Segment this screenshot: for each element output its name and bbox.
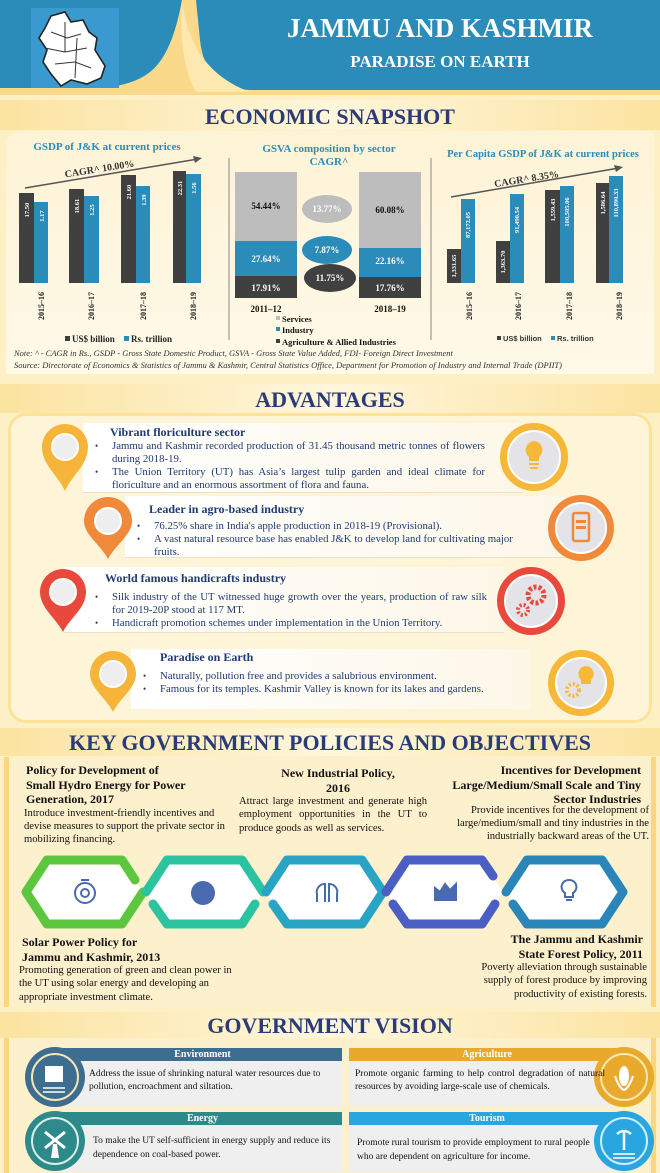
notes and source: Note: ^ - CAGR in Rs., GSDP - Gross State Domestic Product, GSVA - Gross State Value Added, FDI- Foreign Direct Investment — [14, 348, 453, 358]
subtitle: PARADISE ON EARTH — [350, 52, 530, 71]
chart: GSDP bars: Rs. trillion — [131, 334, 172, 344]
chart: GSDP bars: 17.50 — [24, 203, 31, 217]
notes and source — [14, 348, 562, 370]
policy: new industrial: Attract large investment and generate high employment opportunities in the UT to produce goods as well as services. — [239, 796, 427, 834]
card: tourism — [349, 1111, 654, 1172]
title: JAMMU AND KASHMIR — [287, 13, 593, 43]
chart: GSDP bars: 1.25 — [89, 204, 96, 216]
chart: GSVA composition: 54.44% — [251, 201, 281, 211]
policy: forest: State Forest Policy, 2011 — [519, 947, 643, 961]
chart: GSVA composition: GSVA composition by sector — [262, 143, 396, 155]
header banner — [0, 0, 660, 95]
advantage row 2: agro-based: A vast natural resource base has enabled J&K to develop land for cultivating major fruits. — [154, 533, 513, 558]
policy: incentives — [452, 763, 650, 842]
card: tourism: Tourism — [469, 1113, 505, 1124]
policy: incentives: Sector Industries — [554, 792, 641, 806]
policy: incentives: Large/Medium/Small Scale and Tiny — [452, 778, 641, 792]
icon: J&K map — [31, 8, 119, 88]
advantage row 2: agro-based: Leader in agro-based industry — [149, 502, 304, 516]
card: agriculture — [349, 1047, 654, 1107]
policy: incentives: Provide incentives for the development of large/medium/small and tiny industries in the industrially backward areas of the UT. — [457, 805, 649, 842]
chart: GSDP bars: 2018–19 — [189, 292, 198, 320]
advantage row 3: handicrafts: Handicraft promotion schemes under implementation in the Union Territory. — [112, 617, 442, 629]
panel: government vision — [4, 1038, 656, 1173]
policy: new industrial — [239, 766, 427, 834]
icon: bulb gear circle — [548, 650, 614, 716]
chart: per capita GSDP: 1,363.70 — [500, 251, 507, 273]
chart: GSVA composition: 17.76% — [375, 283, 405, 293]
panel: economic snapshot — [6, 131, 654, 374]
icon: mobile circle — [548, 495, 614, 561]
hexagon chain — [22, 856, 628, 928]
chart: GSVA composition — [228, 143, 432, 347]
advantage row 2: agro-based: 76.25% share in India's apple production in 2018-19 (Provisional). — [154, 520, 442, 532]
card: agriculture: Agriculture — [462, 1049, 512, 1060]
advantage row 3: handicrafts: Silk industry of the UT witnessed huge growth over the years, production of raw silk for 2019-20P stood at 117 MT. — [112, 591, 487, 616]
card: energy — [25, 1111, 342, 1172]
advantage row 1: floriculture: Jammu and Kashmir recorded production of 31.45 thousand metric tonnes of flowers during 2018-19. — [112, 440, 485, 465]
chart: GSVA composition: 17.91% — [251, 283, 281, 293]
icon: pin — [40, 569, 86, 632]
policy: small hydro: Generation, 2017 — [26, 792, 114, 806]
chart: GSDP bars: US$ billion — [72, 334, 115, 344]
chart: per capita GSDP: Per Capita GSDP of J&K at current prices — [447, 149, 639, 160]
chart: per capita GSDP: Rs. trillion — [557, 334, 594, 343]
policy: new industrial: New Industrial Policy, — [281, 766, 395, 780]
chart: GSDP bars: 1.39 — [141, 194, 148, 206]
card: energy: To make the UT self-sufficient in energy supply and reduce its dependence on coal-based power. — [93, 1136, 330, 1160]
advantage row 1: floriculture: Vibrant floriculture sector — [110, 425, 245, 439]
card: energy: Energy — [187, 1113, 218, 1124]
card: agriculture: Promote organic farming to help control degradation of natural resources by avoiding large-scale use of chemicals. — [355, 1069, 605, 1092]
card: environment — [25, 1047, 342, 1107]
policy: new industrial: 2016 — [326, 781, 350, 795]
policy: forest: The Jammu and Kashmir — [511, 932, 643, 946]
policy: small hydro: Policy for Development of — [26, 763, 159, 777]
chart: GSDP bars: 2016–17 — [87, 292, 96, 320]
chart: GSDP bars: 18.61 — [74, 199, 81, 213]
chart: GSDP bars: CAGR^ 10.00% — [64, 159, 135, 180]
chart: GSVA composition: Agriculture & Allied Industries — [282, 337, 397, 347]
heading: government vision: GOVERNMENT VISION — [207, 1013, 453, 1038]
chart: GSDP bars: 1.17 — [39, 210, 46, 222]
policy: incentives: Incentives for Development — [501, 763, 641, 777]
policy: forest — [481, 932, 647, 1000]
chart: per capita GSDP: 1,331.65 — [451, 254, 458, 277]
icon: pin — [90, 651, 136, 712]
chart: GSDP bars — [19, 141, 202, 344]
chart: per capita GSDP — [447, 149, 639, 343]
policy: small hydro — [24, 763, 225, 845]
chart: GSVA composition: 22.16% — [375, 256, 405, 266]
chart: per capita GSDP: 1,559.43 — [550, 198, 557, 221]
heading: key government policies: KEY GOVERNMENT POLICIES AND OBJECTIVES — [69, 730, 591, 755]
heading: advantages: ADVANTAGES — [255, 387, 405, 412]
chart: GSDP bars: GSDP of J&K at current prices — [33, 141, 181, 153]
chart: GSDP bars: 21.60 — [126, 185, 133, 199]
chart: GSVA composition: Industry — [282, 325, 314, 335]
chart: per capita GSDP: 87,172.05 — [465, 211, 472, 238]
advantage row 2: agro-based — [84, 495, 614, 561]
chart: GSVA composition: 2011–12 — [250, 304, 282, 314]
icon: pin — [42, 424, 88, 491]
chart: GSVA composition: 13.77% — [312, 204, 342, 214]
chart: per capita GSDP: 2016–17 — [514, 292, 523, 320]
notes and source: Source: Directorate of Economics & Statistics of Jammu & Kashmir, Central Statistics Office, Department for Promotion of Industry and Internal Trade (DPIIT) — [14, 360, 562, 370]
advantage row 4: paradise on earth: Paradise on Earth — [160, 650, 253, 664]
advantage row 1: floriculture — [42, 423, 568, 493]
chart: GSDP bars: 22.31 — [177, 181, 184, 195]
chart: GSVA composition: 60.08% — [375, 205, 405, 215]
chart: GSVA composition: 11.75% — [316, 273, 344, 283]
chart: per capita GSDP: 91,490.54 — [514, 206, 521, 233]
chart: per capita GSDP: 1,586.64 — [600, 191, 607, 214]
chart: per capita GSDP: 100,505.06 — [564, 197, 571, 227]
chart: GSDP bars: 2017–18 — [139, 292, 148, 320]
chart: per capita GSDP: 2017–18 — [565, 292, 574, 320]
icon: gears circle — [497, 567, 565, 635]
chart: GSVA composition: 7.87% — [315, 245, 339, 255]
heading: economic snapshot: ECONOMIC SNAPSHOT — [205, 104, 455, 129]
chart: GSDP bars: 2015–16 — [37, 292, 46, 320]
chart: GSVA composition: 2018–19 — [374, 304, 406, 314]
card: environment: Address the issue of shrinking natural water resources due to pollution, encroachment and siltation. — [89, 1069, 320, 1092]
card: tourism: Promote rural tourism to provide employment to rural people who are dependent on agriculture for income. — [357, 1138, 590, 1162]
policy: small hydro: Introduce investment-friendly incentives and devise measures to support the private sector in mobilizing financing. — [24, 808, 225, 845]
advantage row 4: paradise on earth — [90, 649, 614, 716]
policy: solar: Solar Power Policy for — [22, 935, 137, 949]
policy: small hydro: Small Hydro Energy for Power — [26, 778, 186, 792]
chart: per capita GSDP: US$ billion — [503, 334, 542, 343]
advantage row 4: paradise on earth: Famous for its temples. Kashmir Valley is known for its lakes and gardens. — [160, 683, 484, 695]
policy: solar — [19, 935, 232, 1003]
policy: forest: Poverty alleviation through sustainable supply of forest produce by improving productivity of existing forests. — [481, 962, 647, 1000]
chart: GSVA composition: Services — [282, 314, 312, 324]
advantage row 1: floriculture: The Union Territory (UT) has Asia’s largest tulip garden and ideal climate for floriculture and an enormous assortment of flora and fauna. — [112, 466, 485, 491]
chart: per capita GSDP: 2015–16 — [465, 292, 474, 320]
icon: pin — [84, 497, 132, 559]
advantage row 3: handicrafts: World famous handicrafts industry — [105, 571, 286, 585]
chart: GSVA composition: CAGR^ — [310, 156, 348, 168]
icon: bulb circle — [500, 423, 568, 491]
chart: per capita GSDP: 110,890.33 — [613, 188, 620, 217]
panel: policies — [4, 757, 656, 1007]
card: environment: Environment — [174, 1049, 231, 1060]
chart: per capita GSDP: CAGR^ 8.35% — [494, 169, 560, 190]
advantage row 3: handicrafts — [40, 567, 565, 635]
chart: GSDP bars: 1.56 — [191, 182, 198, 194]
chart: per capita GSDP: 2018–19 — [615, 292, 624, 320]
panel: advantages — [8, 413, 652, 723]
chart: GSVA composition: 27.64% — [251, 254, 281, 264]
policy: solar: Promoting generation of green and clean power in the UT using solar energy and developing an appropriate investment climate. — [19, 965, 232, 1003]
policy: solar: Jammu and Kashmir, 2013 — [22, 950, 160, 964]
advantage row 4: paradise on earth: Naturally, pollution free and provides a salubrious environment. — [160, 670, 437, 682]
